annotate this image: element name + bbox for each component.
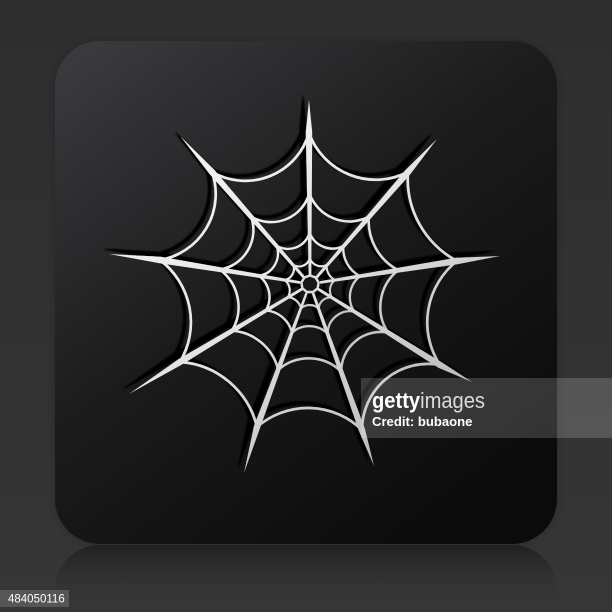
reflection of square <box>55 545 557 612</box>
square shadow <box>54 40 558 545</box>
web spokes <box>109 100 500 473</box>
web hub <box>301 276 319 292</box>
credit line: Credit: bubaone <box>372 414 472 429</box>
panel: black rounded square <box>55 41 557 544</box>
web rings <box>160 133 457 430</box>
image id label: 484050116 <box>8 594 65 606</box>
watermark logo: gettyimages <box>372 388 485 413</box>
icon: spider web <box>109 100 500 473</box>
watermark band <box>361 378 612 438</box>
image id label <box>0 590 69 607</box>
